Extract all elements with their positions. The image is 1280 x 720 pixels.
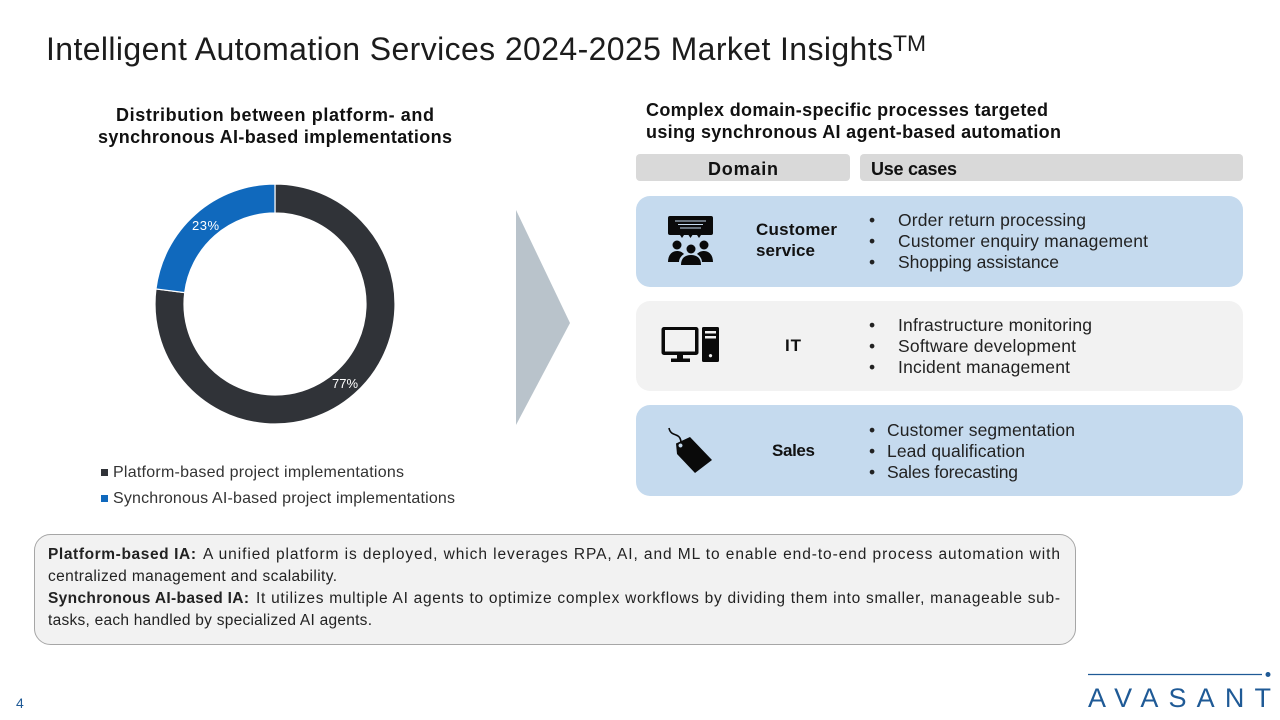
column header: domain [636, 154, 850, 181]
use cases list [869, 315, 1092, 377]
legend: Platform-based project implementations [113, 464, 404, 481]
heading: complex domain-specific processes [646, 100, 1061, 142]
use cases list [869, 420, 1075, 482]
domain label: Sales [772, 441, 815, 460]
use cases list: • [869, 357, 875, 377]
use cases list: Sales forecasting [887, 462, 1018, 482]
use cases list: Customer enquiry management [898, 231, 1148, 251]
heading: distribution [98, 105, 452, 147]
use cases list: • [869, 252, 875, 272]
callout: definitions: tasks, each handled by specialized AI agents. [48, 612, 372, 629]
use cases list: Infrastructure monitoring [898, 315, 1092, 335]
panel: IT [636, 301, 1243, 391]
use cases list: Customer segmentation [887, 420, 1075, 440]
panel: sales [636, 405, 1243, 496]
icon: price tag [669, 428, 712, 473]
title: Intelligent Automation Services 2024-2025 Market Insights [46, 31, 893, 67]
arrow [516, 210, 570, 425]
panel: customer service [636, 196, 1243, 287]
label: 77%: 77% [332, 376, 358, 391]
callout: definitions: It utilizes multiple AI agents to optimize complex workflows by dividing them into smaller, manageable sub- [256, 590, 1060, 607]
title: TM [893, 31, 926, 56]
use cases list: • [869, 441, 875, 461]
column header: domain: Domain [708, 159, 778, 179]
domain label: Customer [756, 220, 837, 239]
use cases list: Shopping assistance [898, 252, 1059, 272]
use cases list: Incident management [898, 357, 1070, 377]
use cases list: Order return processing [898, 210, 1086, 230]
domain label [756, 220, 837, 260]
use cases list: • [869, 210, 875, 230]
domain label: service [756, 241, 815, 260]
use cases list: • [869, 420, 875, 440]
legend: Synchronous AI-based project implementations [113, 490, 455, 507]
page number: 4 [16, 695, 24, 711]
donut chart [155, 184, 395, 424]
callout: definitions: Platform-based IA: [48, 546, 196, 563]
heading: distribution: Distribution between platform- and [116, 105, 434, 125]
use cases list: Software development [898, 336, 1076, 356]
callout: definitions: centralized management and scalability. [48, 568, 337, 585]
use cases list: • [869, 231, 875, 251]
label: 23%: 23% [192, 218, 219, 233]
use cases list [869, 210, 1148, 272]
segment: synchronous AI-based 23% [156, 184, 275, 293]
segment: platform-based 77% [155, 184, 395, 424]
heading: complex domain-specific processes: Complex domain-specific processes targeted [646, 100, 1048, 120]
use cases list: • [869, 462, 875, 482]
icon: customer service [668, 216, 713, 265]
logo: Avasant: AVASANT [1088, 683, 1271, 713]
use cases list: • [869, 315, 875, 335]
callout: definitions [34, 534, 1076, 644]
column header: use cases: Use cases [871, 159, 957, 179]
heading: complex domain-specific processes: using synchronous AI agent-based automation [646, 122, 1061, 142]
use cases list: Lead qualification [887, 441, 1025, 461]
domain label: IT [785, 336, 802, 355]
column header: use cases [860, 154, 1243, 181]
callout: definitions: Synchronous AI-based IA: [48, 590, 249, 607]
heading: distribution: synchronous AI-based implementations [98, 127, 452, 147]
callout: definitions: A unified platform is deployed, which leverages RPA, AI, and ML to enable end-to-end process automation with [203, 546, 1060, 563]
legend [101, 464, 455, 507]
use cases list: • [869, 336, 875, 356]
icon: computer [662, 327, 719, 362]
